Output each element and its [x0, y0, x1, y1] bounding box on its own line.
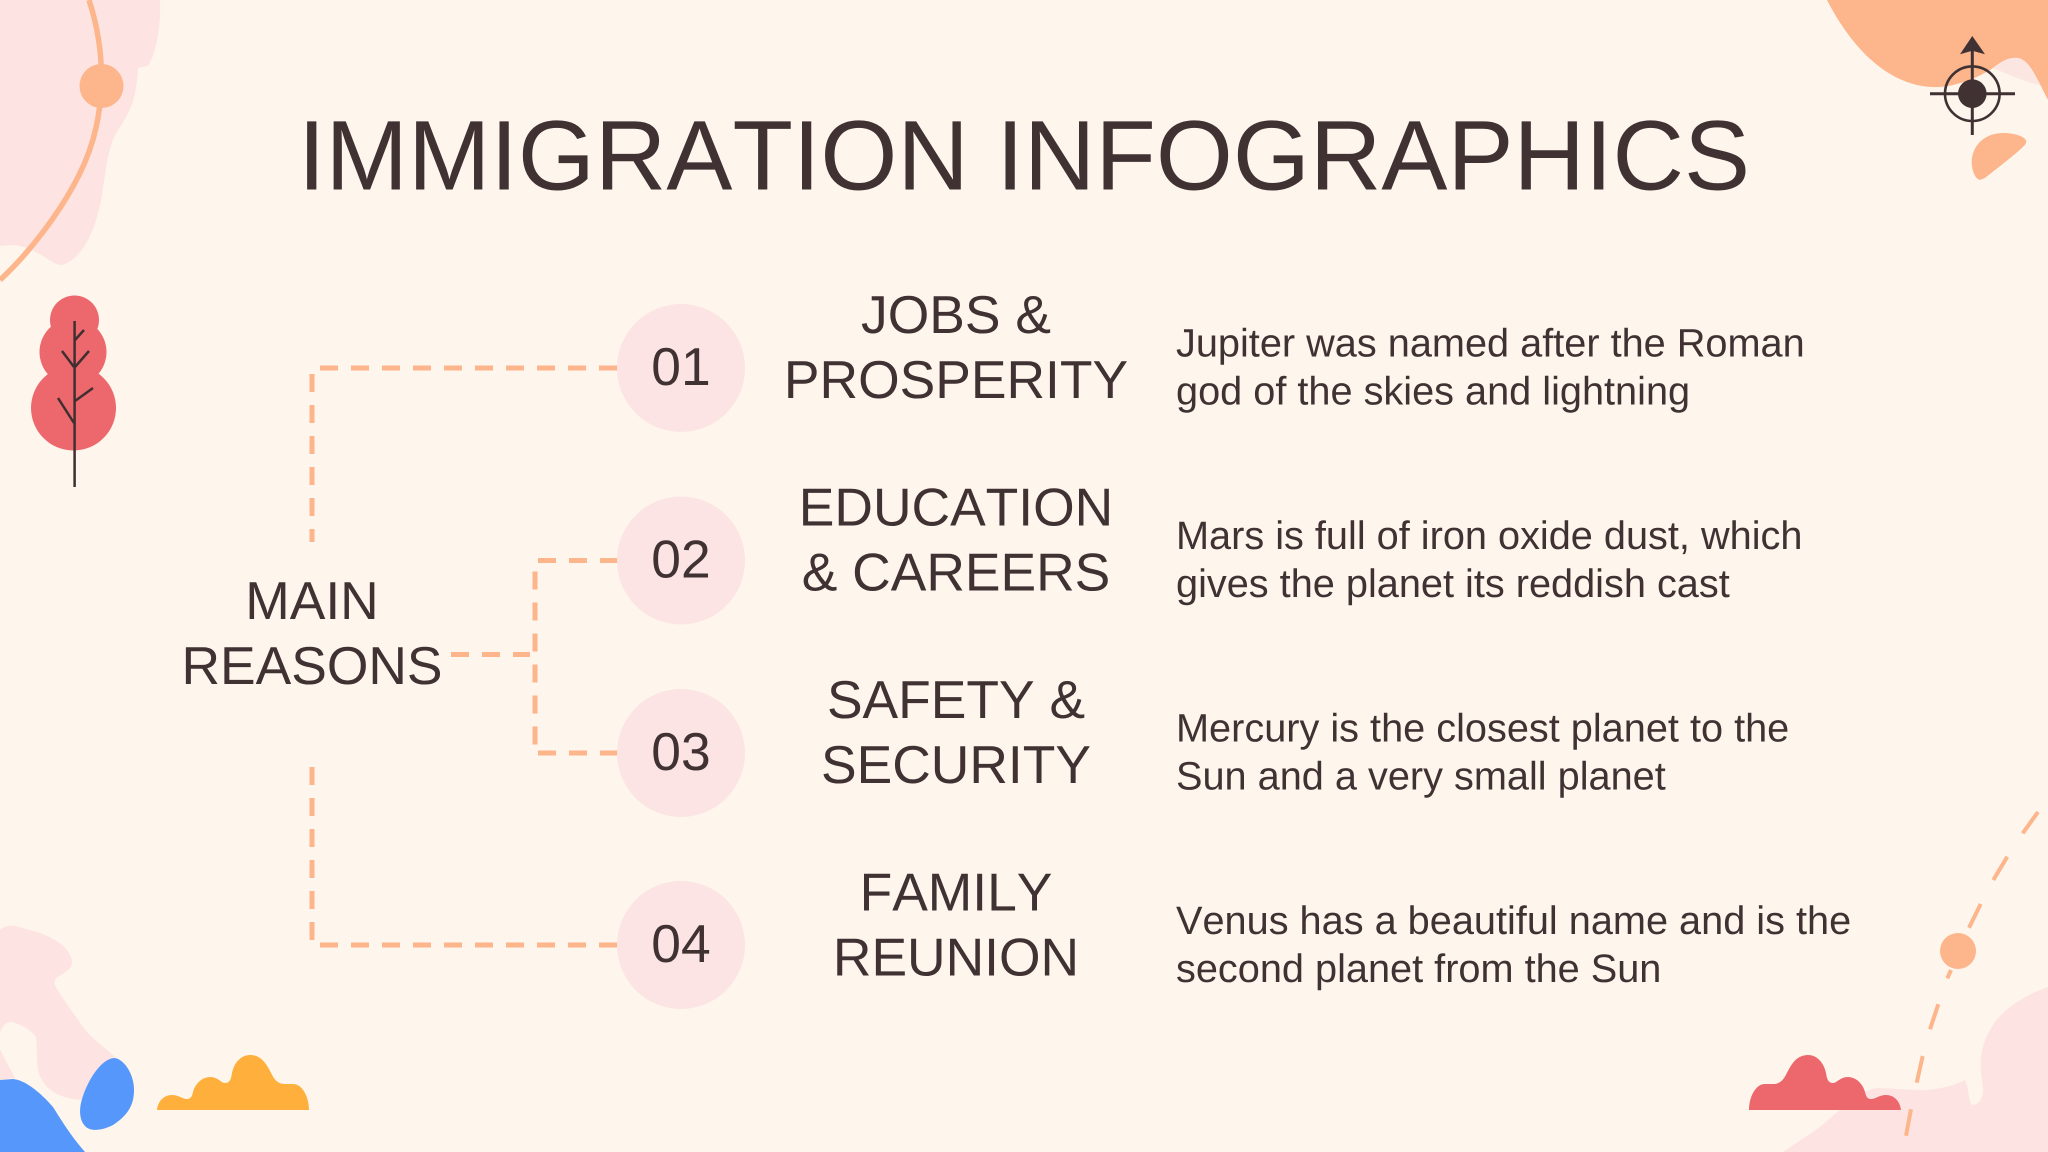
number badge 01: 01	[651, 338, 711, 397]
description 04: Venus has a beautiful name and is the	[1176, 899, 1851, 943]
row 02: education and careers	[617, 478, 1802, 624]
connector: main reasons to 02 and 03	[451, 560, 618, 753]
description 02: Mars is full of iron oxide dust, which	[1176, 514, 1802, 558]
row 01: jobs and prosperity	[617, 286, 1805, 432]
number badge 03	[617, 689, 745, 817]
heading 03: SECURITY	[821, 736, 1091, 795]
number badge 02: 02	[651, 530, 711, 590]
icon: red cloud	[1749, 1055, 1901, 1110]
icon: yellow cloud	[157, 1055, 309, 1110]
decoration: bottom-right blob	[1783, 987, 2048, 1152]
heading 01: PROSPERITY	[784, 351, 1128, 410]
description 04: second planet from the Sun	[1176, 947, 1661, 991]
row 03: safety and security	[617, 671, 1789, 817]
decoration: top-left blob and orbit	[0, 0, 160, 280]
description 03: Sun and a very small planet	[1176, 754, 1666, 798]
number badge 04: 04	[651, 915, 711, 974]
description 01: Jupiter was named after the Roman	[1176, 322, 1805, 366]
connector: main reasons to 04	[312, 767, 618, 945]
description 02: gives the planet its reddish cast	[1176, 562, 1730, 606]
decoration: dashed flight path with dot	[1906, 812, 2038, 1136]
heading: main reasons: MAIN	[245, 572, 379, 631]
row 04: family reunion	[617, 864, 1851, 1009]
number badge 03: 03	[651, 723, 711, 782]
connector: main reasons to 01	[312, 368, 618, 542]
heading 02: EDUCATION	[799, 478, 1113, 538]
heading 03: SAFETY &	[827, 671, 1085, 730]
description 01: god of the skies and lightning	[1176, 370, 1690, 414]
decoration: bottom-left blobs	[0, 926, 134, 1152]
heading 01: JOBS &	[861, 286, 1051, 345]
heading 04: REUNION	[833, 928, 1079, 988]
number badge 04	[617, 881, 745, 1009]
number badge 01	[617, 304, 745, 432]
heading: main reasons: REASONS	[181, 637, 443, 696]
title: IMMIGRATION INFOGRAPHICS	[298, 100, 1750, 210]
heading 04: FAMILY	[860, 864, 1052, 922]
description 03: Mercury is the closest planet to the	[1176, 706, 1789, 750]
heading 02: & CAREERS	[802, 544, 1110, 602]
icon: red tree	[31, 296, 116, 487]
number badge 02	[617, 496, 745, 624]
icon: compass target	[1930, 36, 2015, 135]
decoration: top-right blob	[1827, 0, 2048, 180]
